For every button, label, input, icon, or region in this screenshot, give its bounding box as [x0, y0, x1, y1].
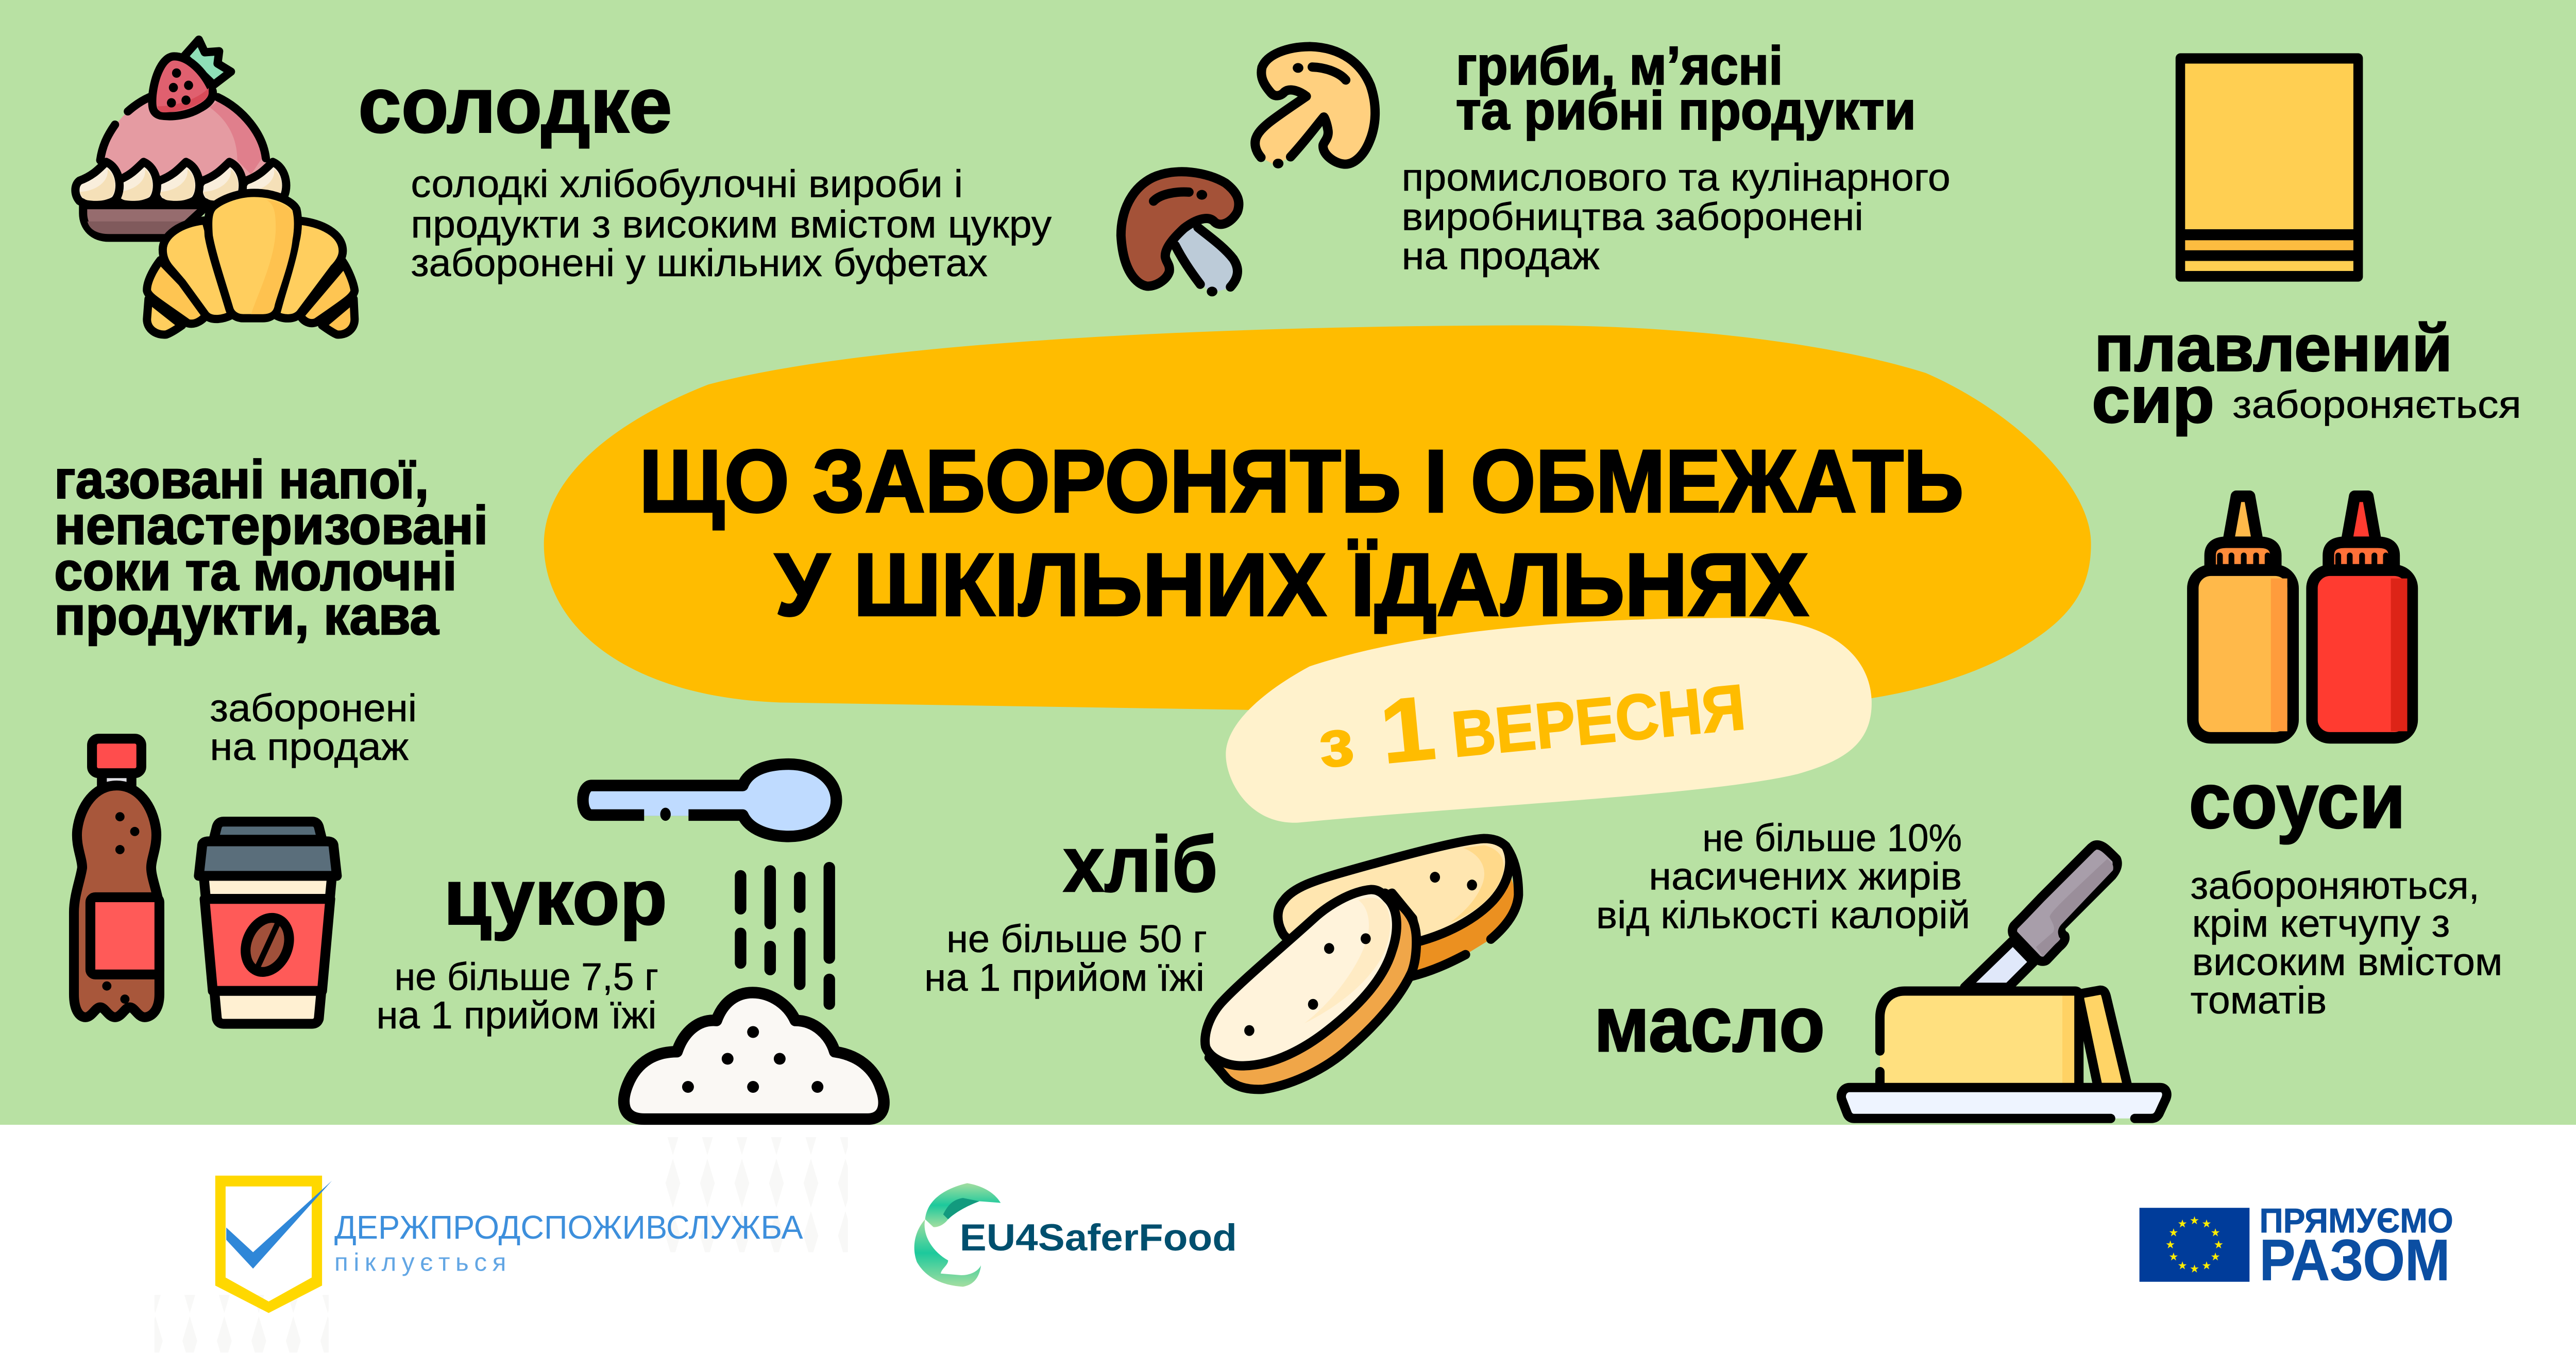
- heading: drinks: газовані напої,: [54, 449, 429, 510]
- text: bread limit: не більше 50 г: [946, 917, 1207, 960]
- panel: sauces: [2189, 496, 2502, 1022]
- text: moving together: [2259, 1202, 2453, 1293]
- icon: falling sugar: [740, 868, 829, 1004]
- text: mushrooms description: на продаж: [1402, 234, 1600, 277]
- heading: drinks: соки та молочні: [54, 542, 457, 602]
- heading: drinks: продукти, кава: [54, 586, 439, 646]
- date badge: з: [1315, 706, 1357, 782]
- heading: processed cheese: сир: [2092, 364, 2214, 437]
- text: agency name: ДЕРЖПРОДСПОЖИВСЛУЖБА: [334, 1209, 803, 1246]
- panel: bread: [924, 820, 1518, 1089]
- icon: sugar pile: [624, 992, 884, 1119]
- text: butter limit: від кількості калорій: [1596, 893, 1970, 936]
- icon: cake with strawberry: [75, 40, 286, 238]
- text: bread limit: на 1 прийом їжі: [924, 956, 1205, 999]
- logo: Derzhprodspozhyvsluzhba: [215, 1176, 803, 1313]
- text: sweets description: заборонені у шкільних буфетах: [411, 241, 988, 284]
- text: drinks prohibited: заборонені: [210, 686, 417, 730]
- panel: drinks: [54, 449, 488, 1024]
- icon: butter knife: [1964, 845, 2117, 987]
- title: [639, 432, 1963, 634]
- text: mushrooms description: виробництва заборонені: [1402, 195, 1863, 239]
- text: drinks prohibited: [210, 686, 417, 768]
- icon: spoon: [583, 764, 836, 836]
- icon: shield with check: [215, 1176, 332, 1313]
- icon: cheese block: [2176, 53, 2363, 282]
- text: sweets description: солодкі хлібобулочні вироби і: [411, 162, 963, 206]
- heading: processed cheese: [2092, 312, 2452, 437]
- text: EU4SaferFood: EU4SaferFood: [960, 1216, 1237, 1259]
- text: butter limit: насичених жирів: [1649, 855, 1962, 898]
- heading: sweets: солодке: [358, 61, 672, 149]
- text: sugar limit: на 1 прийом їжі: [376, 993, 656, 1037]
- date badge: [1226, 618, 1872, 823]
- icon: coffee cup: [199, 822, 337, 1024]
- heading: sugar: цукор: [444, 853, 667, 941]
- text: sauces description: [2190, 864, 2502, 1022]
- text: butter limit: [1596, 816, 1970, 936]
- text: sauces description: томатів: [2190, 978, 2327, 1022]
- text: moving together: ПРЯМУЄМО: [2259, 1202, 2453, 1240]
- icon: swirl: [914, 1183, 1001, 1287]
- title: ЩО ЗАБОРОНЯТЬ І ОБМЕЖАТЬ: [639, 432, 1963, 531]
- icon: croissant: [147, 193, 354, 334]
- heading: drinks: непастеризовані: [54, 496, 488, 556]
- panel: mushrooms: [1121, 36, 1951, 296]
- text: mushrooms description: [1402, 156, 1951, 277]
- text: sauces description: крім кетчупу з: [2192, 902, 2450, 945]
- text: bread limit: [924, 917, 1207, 999]
- heading: mushrooms: гриби, м’ясні: [1456, 36, 1783, 96]
- icon: soda bottle: [74, 739, 159, 1017]
- date badge: 1: [1376, 677, 1439, 783]
- panel: processed cheese: [2092, 53, 2521, 437]
- text: sugar limit: не більше 7,5 г: [394, 955, 658, 998]
- panel: butter: [1594, 816, 2167, 1119]
- central title blob: [544, 326, 2091, 710]
- date badge: ВЕРЕСНЯ: [1449, 671, 1748, 771]
- icon: butter block: [1841, 990, 2167, 1119]
- logo: EU flag: [2140, 1208, 2249, 1282]
- heading: bread: хліб: [1063, 820, 1217, 908]
- panel: sweets: [75, 40, 1052, 334]
- icon: bread slices: [1205, 839, 1518, 1089]
- text: moving together: РАЗОМ: [2259, 1228, 2450, 1293]
- text: sweets description: [411, 162, 1052, 284]
- icon: light mushroom: [1255, 46, 1375, 168]
- panel: sugar: [376, 764, 884, 1119]
- text: sugar limit: [376, 955, 658, 1037]
- heading: drinks: [54, 449, 488, 646]
- heading: sauces: соуси: [2189, 757, 2405, 845]
- text: mushrooms description: промислового та кулінарного: [1402, 156, 1951, 199]
- text: sauces description: забороняються,: [2190, 864, 2480, 907]
- heading: mushrooms: [1456, 36, 1916, 141]
- text: butter limit: не більше 10%: [1702, 816, 1962, 859]
- icon: mustard bottle: [2193, 496, 2293, 738]
- icon: brown mushroom: [1121, 172, 1239, 296]
- heading: butter: масло: [1594, 980, 1825, 1068]
- text: sauces description: високим вмістом: [2192, 940, 2502, 983]
- text: drinks prohibited: на продаж: [210, 725, 409, 768]
- text: sweets description: продукти з високим вмістом цукру: [411, 202, 1052, 246]
- heading: mushrooms: та рибні продукти: [1456, 81, 1916, 141]
- icon: ketchup bottle: [2312, 496, 2412, 738]
- footer band: [0, 1125, 2576, 1353]
- heading: processed cheese: плавлений: [2094, 312, 2452, 385]
- text: agency tagline: піклується: [334, 1248, 506, 1277]
- logo: EU4SaferFood: [914, 1183, 1237, 1287]
- title: У ШКІЛЬНИХ ЇДАЛЬНЯХ: [775, 535, 1808, 634]
- text: cheese prohibited: забороняється: [2232, 383, 2521, 426]
